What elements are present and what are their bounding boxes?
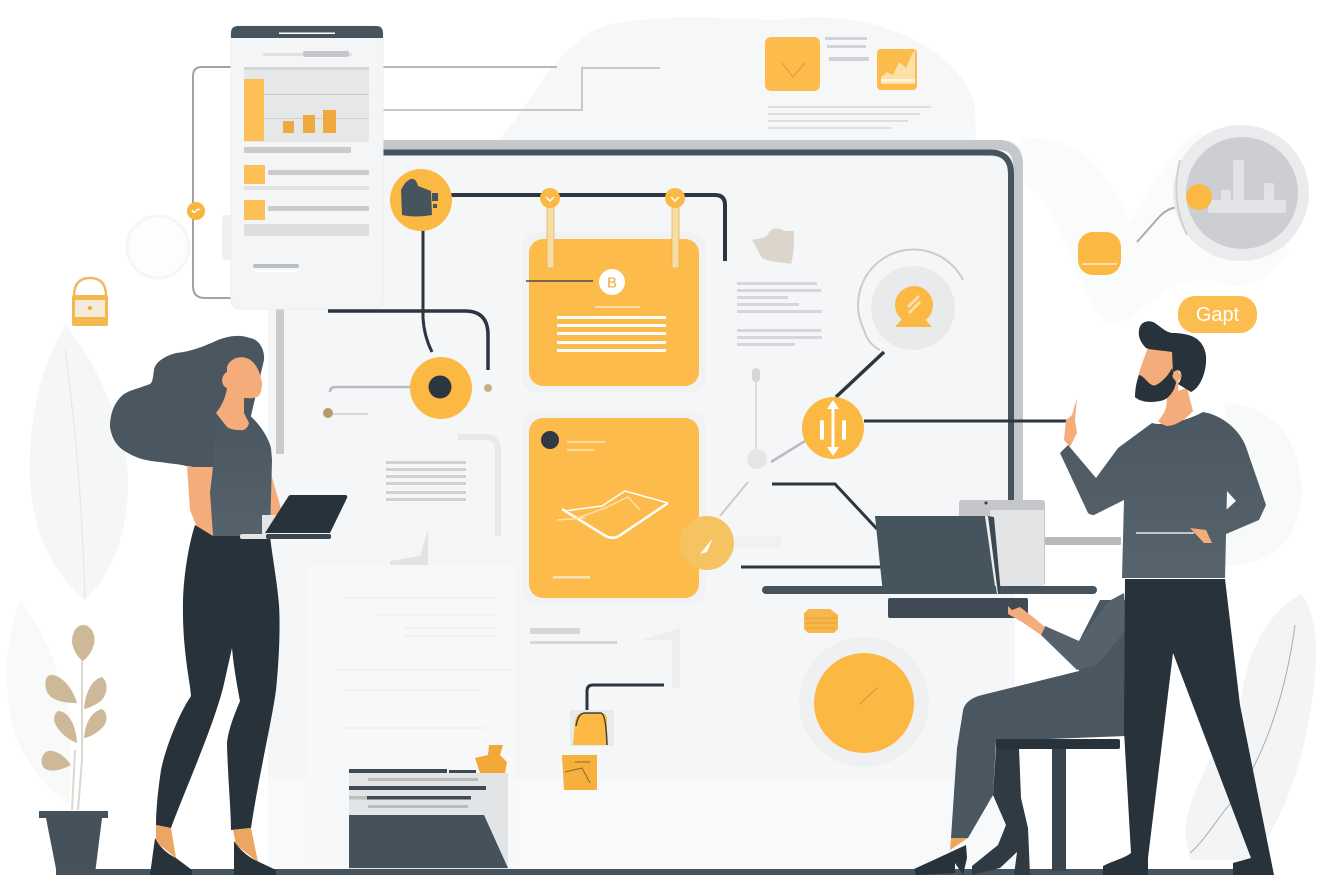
orange tag bbox=[570, 710, 614, 746]
decorative leaf: left tall bbox=[30, 325, 128, 600]
back leg bbox=[972, 748, 1030, 875]
panel: phone dashboard bbox=[231, 26, 383, 309]
monitor board bbox=[268, 140, 1023, 870]
big orange circle bbox=[799, 637, 929, 767]
woman pants bbox=[156, 525, 280, 830]
label pill bbox=[1178, 296, 1257, 333]
faint tab beside phone bbox=[222, 215, 234, 260]
panel: orange chart card bbox=[522, 411, 706, 605]
man ear bbox=[1172, 372, 1182, 380]
woman shoes bbox=[150, 838, 276, 875]
desk drawer bbox=[888, 598, 1028, 618]
icon: tan glove bbox=[752, 228, 794, 264]
man hand at waist bbox=[1190, 528, 1212, 543]
floor line bbox=[56, 869, 1272, 875]
stool leg bbox=[1052, 749, 1066, 871]
gray connector lines from phone bbox=[193, 67, 660, 298]
faint circle left bbox=[127, 216, 189, 278]
man raised hand bbox=[1064, 398, 1077, 447]
standing man figure bbox=[1060, 321, 1274, 875]
desk top bbox=[762, 586, 1097, 594]
lower pale sheet bbox=[308, 565, 515, 870]
dark connector lines bbox=[328, 195, 1068, 714]
background cloud: right bbox=[1020, 130, 1290, 322]
woman shirt bbox=[210, 413, 272, 536]
orange small chip bbox=[804, 609, 838, 633]
top small lines bbox=[825, 37, 869, 61]
card avatar bbox=[541, 431, 559, 449]
text block: right lines bbox=[737, 282, 822, 346]
phone text rows bbox=[244, 147, 369, 272]
man pants bbox=[1103, 579, 1274, 875]
desk laptop bbox=[875, 516, 1001, 594]
icon: target badge bbox=[330, 357, 472, 419]
badge: B bbox=[607, 274, 617, 292]
woman right arm bbox=[262, 450, 284, 525]
small node: left bbox=[323, 384, 492, 418]
icon: orange pill bbox=[1078, 232, 1121, 275]
front shoe bbox=[914, 845, 967, 875]
text block: lower middle bbox=[530, 628, 617, 644]
plant stem bbox=[72, 660, 82, 810]
pale bracket bbox=[390, 530, 428, 565]
pin: right bbox=[665, 188, 685, 268]
icon: lamp badge bbox=[858, 250, 963, 350]
printer stack bbox=[349, 769, 508, 869]
decorative leaf: right bbox=[1185, 594, 1316, 860]
torso and sleeve bbox=[1041, 593, 1126, 670]
man face bbox=[1135, 348, 1180, 398]
phone header bbox=[231, 26, 383, 38]
woman left arm bbox=[187, 467, 225, 581]
icon: padlock bbox=[72, 278, 108, 326]
pale grid fragment bbox=[642, 628, 680, 688]
connector hub bbox=[720, 368, 805, 516]
woman hair bbox=[110, 336, 264, 470]
icon: gray chart circle bbox=[1137, 125, 1309, 261]
hand bbox=[1008, 606, 1045, 635]
tablet behind laptop bbox=[959, 500, 1121, 586]
top orange check card bbox=[765, 37, 820, 91]
desk laptop group bbox=[762, 500, 1121, 618]
front leg and skirt bbox=[951, 600, 1126, 838]
phone search bar bbox=[263, 51, 352, 57]
plant bbox=[39, 625, 108, 874]
label pill: Gapt bbox=[1196, 304, 1240, 326]
man hair bbox=[1139, 321, 1206, 392]
woman face and neck bbox=[216, 357, 262, 430]
woman laptop bbox=[240, 495, 347, 539]
stool seat bbox=[996, 739, 1120, 749]
connector node on phone line bbox=[187, 202, 205, 220]
card footer line bbox=[553, 576, 590, 578]
text block: left lines bbox=[386, 461, 466, 501]
orange parcel bbox=[562, 755, 597, 790]
woman ankles bbox=[156, 825, 258, 862]
decorative leaf: left low bbox=[7, 600, 70, 805]
panel: orange text card bbox=[522, 232, 706, 393]
card divider line bbox=[526, 280, 593, 282]
top text lines bbox=[768, 106, 931, 129]
man neck bbox=[1158, 388, 1193, 426]
plant leaves bbox=[41, 625, 107, 771]
icon: hand badge bbox=[390, 169, 452, 231]
icon: clock badge bbox=[680, 516, 781, 570]
card line chart bbox=[557, 491, 668, 538]
decorative blob behind man bbox=[1225, 405, 1302, 566]
background cloud: top bbox=[497, 17, 976, 141]
icon: arrows badge bbox=[802, 397, 864, 459]
phone bar chart bbox=[244, 67, 369, 142]
man tablet line bbox=[1136, 532, 1194, 534]
badge bbox=[599, 269, 625, 295]
woman figure bbox=[110, 336, 347, 875]
pin: left bbox=[540, 188, 560, 268]
card text lines bbox=[557, 306, 666, 352]
curved pale connector bbox=[458, 437, 498, 536]
top chart icon bbox=[877, 49, 917, 90]
man beard bbox=[1135, 368, 1176, 402]
orange package on stack bbox=[475, 745, 507, 773]
card heading lines bbox=[567, 441, 605, 451]
ankle bbox=[950, 838, 968, 850]
seated woman and stool bbox=[914, 593, 1126, 875]
plant pot bbox=[39, 811, 108, 874]
man torso bbox=[1060, 412, 1266, 578]
